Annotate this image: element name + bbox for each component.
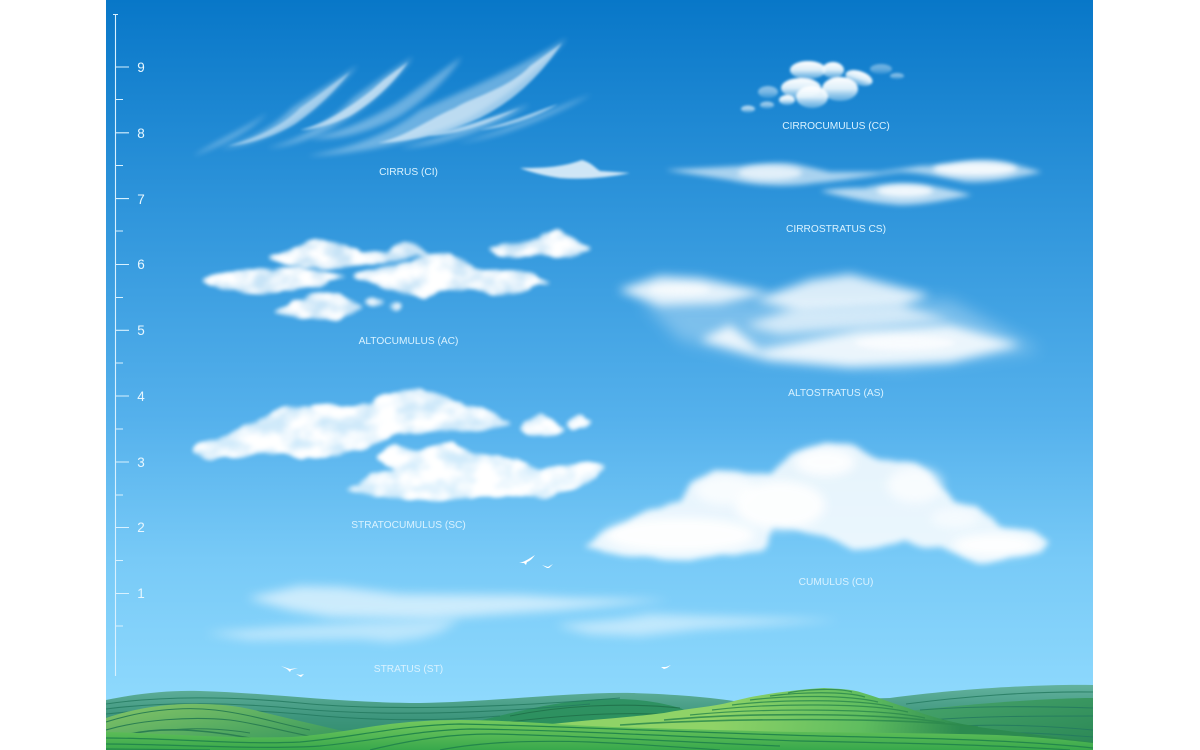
cloud labels: CUMULUS (CU) (799, 577, 873, 588)
altitude numbers: 9 (137, 60, 145, 75)
cloud: cirrus (193, 38, 592, 156)
cloud: cirrocumulus (741, 61, 904, 112)
cloud labels: CIRROSTRATUS CS) (786, 224, 886, 235)
cloud: stratus (205, 586, 840, 642)
cloud labels: CIRRUS (CI) (379, 167, 438, 178)
cloud labels: CIRROCUMULUS (CC) (782, 121, 890, 132)
altitude numbers: 1 (137, 586, 145, 601)
cloud labels (351, 121, 890, 675)
cloud: cumulus (585, 442, 1050, 562)
altitude numbers: 4 (137, 389, 145, 404)
altitude numbers: 7 (137, 192, 145, 207)
altitude numbers: 2 (137, 520, 145, 535)
altitude numbers: 8 (137, 126, 145, 141)
cloud labels: ALTOCUMULUS (AC) (359, 336, 458, 347)
altitude numbers (137, 60, 145, 601)
landscape: green hills (106, 685, 1100, 750)
cloud labels: ALTOSTRATUS (AS) (788, 388, 884, 399)
cloud: altocumulus (203, 229, 592, 320)
cloud labels: STRATUS (ST) (374, 664, 443, 675)
altitude scale (113, 14, 129, 676)
cloud: cirrostratus (665, 160, 1042, 205)
cloud: altostratus (618, 274, 1040, 368)
altitude numbers: 3 (137, 455, 145, 470)
cloud labels: STRATOCUMULUS (SC) (351, 520, 466, 531)
altitude numbers: 6 (137, 257, 145, 272)
cloud: stratocumulus (193, 392, 603, 500)
birds (281, 555, 671, 677)
cloud: small wisp (520, 160, 630, 179)
altitude numbers: 5 (137, 323, 145, 338)
